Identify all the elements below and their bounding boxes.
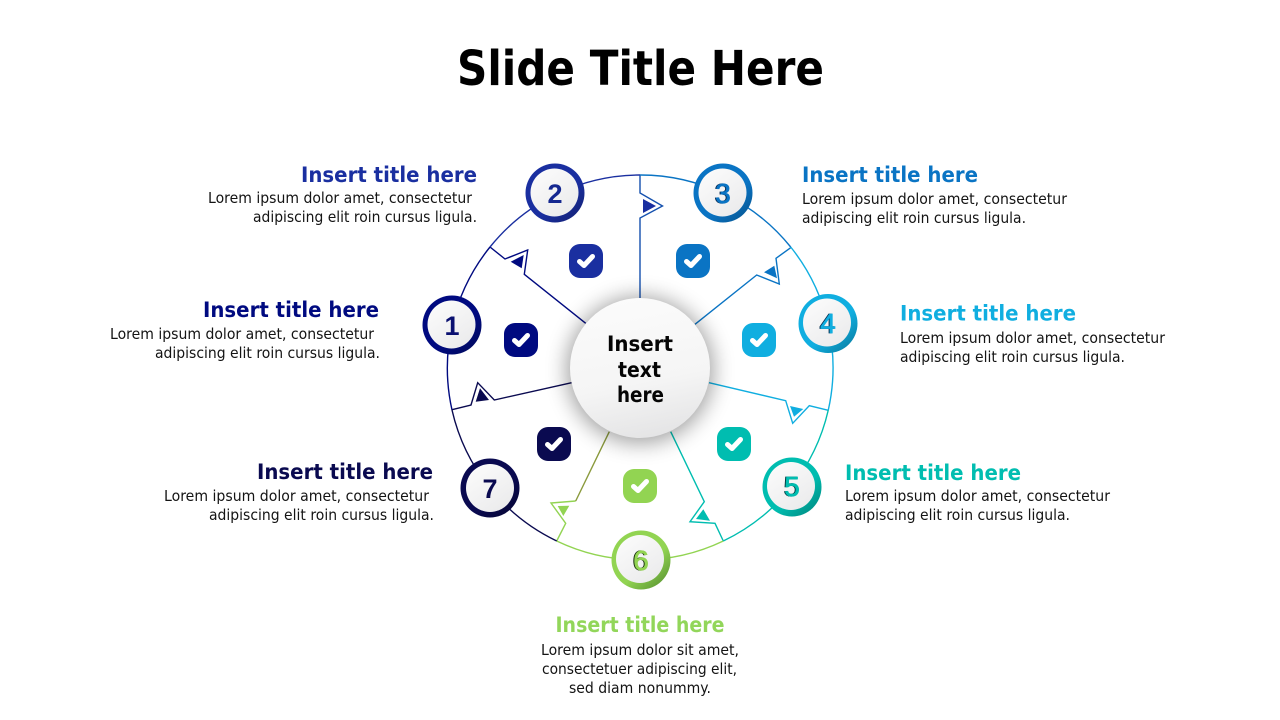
text block 2: adipiscing elit roin cursus ligula.	[253, 208, 477, 226]
sector 1 boundary	[447, 247, 586, 410]
icon: check badge 4	[742, 323, 776, 357]
number node 3	[694, 164, 752, 222]
text block 7: adipiscing elit roin cursus ligula.	[209, 506, 434, 524]
sector 3 boundary	[640, 175, 791, 324]
sector 7 boundary	[452, 383, 572, 541]
text block 1: Lorem ipsum dolor amet, consectetur	[110, 325, 375, 343]
sector 4 boundary	[709, 247, 833, 423]
icon: check badge 7	[537, 427, 571, 461]
text block 1: adipiscing elit roin cursus ligula.	[155, 344, 380, 362]
number node 7: 7	[482, 474, 498, 504]
text block 1: Insert title here	[203, 298, 379, 323]
text block 4: Lorem ipsum dolor amet, consectetur	[900, 329, 1166, 347]
wheel outline with seven notched sectors	[447, 175, 833, 560]
number node 2	[526, 164, 584, 222]
text block 3	[802, 163, 1068, 227]
number node 2: 2	[547, 179, 563, 209]
center hub: text	[618, 358, 661, 382]
number node 6: 6	[633, 545, 649, 576]
number node 5: 5	[784, 471, 800, 502]
number node 6	[612, 530, 670, 590]
number node 4	[798, 294, 858, 353]
text block 6: consectetuer adipiscing elit,	[542, 660, 737, 678]
text block 5: adipiscing elit roin cursus ligula.	[845, 506, 1070, 524]
text block 7: Lorem ipsum dolor amet, consectetur	[164, 487, 430, 505]
text block 3: adipiscing elit roin cursus ligula.	[802, 209, 1026, 227]
text block 1	[110, 298, 380, 362]
text block 6: Lorem ipsum dolor sit amet,	[541, 641, 739, 659]
sector 5 boundary	[671, 410, 828, 541]
text block 6: Insert title here	[556, 613, 724, 638]
text block 6: sed diam nonummy.	[569, 679, 711, 697]
text block 3: Insert title here	[802, 163, 978, 188]
text block 2: Insert title here	[301, 163, 477, 188]
center hub: here	[617, 383, 664, 407]
icon: check badge 6	[623, 469, 657, 503]
text block 5: Insert title here	[845, 461, 1021, 486]
text block 6	[541, 613, 739, 697]
text block 7: Insert title here	[257, 460, 433, 485]
icon: check badge 1	[504, 323, 538, 357]
text block 5: Lorem ipsum dolor amet, consectetur	[845, 487, 1111, 505]
text block 2: Lorem ipsum dolor amet, consectetur	[208, 189, 473, 207]
sector 2 boundary	[490, 175, 662, 298]
text block 4: adipiscing elit roin cursus ligula.	[900, 348, 1125, 366]
text block 4	[900, 302, 1166, 366]
center hub	[567, 297, 713, 443]
title: Slide Title Here	[457, 41, 824, 97]
icon: check badge 3	[676, 244, 710, 278]
number node 1	[422, 296, 482, 354]
text block 2	[208, 163, 477, 226]
number node 7	[460, 458, 520, 518]
center hub: Insert	[607, 332, 673, 356]
text block 7	[164, 460, 434, 524]
text block 3: Lorem ipsum dolor amet, consectetur	[802, 190, 1068, 208]
number node 4: 4	[820, 308, 836, 339]
text block 4: Insert title here	[900, 302, 1076, 326]
icon: check badge 5	[717, 427, 751, 461]
number node 1: 1	[444, 311, 460, 341]
number node 5	[762, 458, 822, 516]
text block 5	[845, 461, 1111, 524]
sector 6 boundary	[551, 432, 723, 560]
icon: check badge 2	[569, 244, 603, 278]
number node 3: 3	[715, 178, 731, 209]
